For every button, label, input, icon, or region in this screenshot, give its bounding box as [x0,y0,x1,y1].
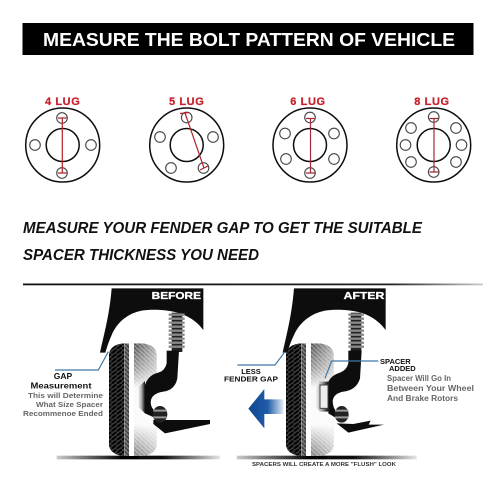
ball joint [153,406,167,423]
less fender gap label [224,367,278,384]
6 lug diagram [273,96,347,182]
after label: AFTER [344,291,385,302]
bolt pattern diagrams [26,96,471,182]
gap measurement callout: Measurement [30,380,92,390]
6 lug diagram: 6 LUG [290,96,326,108]
5 lug diagram [150,96,224,182]
coil spring [169,313,185,352]
flush look caption: SPACERS WILL CREATE A MORE "FLUSH" LOOK [252,462,396,468]
lower control arm [153,420,210,433]
gap measurement callout [23,371,103,418]
tire [286,343,334,456]
less fender gap label: LESS [241,367,261,376]
ground shadow [237,456,417,459]
tire [109,343,157,456]
section divider [23,284,483,285]
spacer added callout [380,357,474,403]
gap measurement callout: Recommenoe Ended [23,409,103,418]
8 lug diagram: 8 LUG [414,96,450,108]
gap pointer [55,352,108,370]
gap measurement callout: GAP [54,371,73,381]
4 lug diagram: 4 LUG [45,96,80,108]
spacer added callout: Between Your Wheel [387,384,474,393]
spacer added callout: And Brake Rotors [387,394,459,403]
fender [283,288,386,353]
fender [100,288,203,353]
gap measurement callout: This will Determine [28,391,103,400]
lower control arm [337,421,384,433]
panel: before [55,288,220,459]
spacer added callout: SPACER [380,357,411,366]
spacer added callout: ADDED [389,364,416,373]
5 lug diagram: 5 LUG [169,96,204,108]
gap measurement callout: What Size Spacer [36,400,103,409]
ball joint [335,406,349,423]
ground shadow [57,456,220,459]
less fender gap pointer [237,352,285,365]
spacer pointer [325,361,378,378]
blue arrow [248,389,283,428]
4 lug diagram [26,96,100,182]
spacer [315,382,328,412]
less fender gap label: FENDER GAP [224,374,278,384]
fender gap instruction text [23,220,423,264]
coil spring [348,313,364,351]
fender gap instruction text: SPACER THICKNESS YOU NEED [23,247,259,264]
fender gap instruction text: MEASURE YOUR FENDER GAP TO GET THE SUITABLE [23,220,423,237]
before label: BEFORE [152,291,201,302]
spacer added callout: Spacer Will Go In [387,374,451,383]
title banner [22,23,474,55]
suspension knuckle [145,351,179,417]
8 lug diagram [397,96,471,182]
suspension knuckle [328,351,362,417]
panel: after [237,288,417,459]
title banner: MEASURE THE BOLT PATTERN OF VEHICLE [43,29,455,50]
